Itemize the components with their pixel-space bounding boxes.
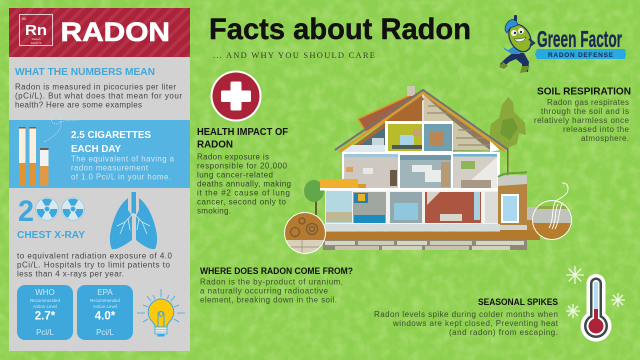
garage wing xyxy=(498,172,527,225)
body: health impact: it the #2 cause of lung xyxy=(197,188,290,198)
text block: chest x-ray: to equivalent radiation exposure of 4.0 xyxy=(17,252,173,260)
icon: cigarettes xyxy=(19,127,48,186)
panel header: radon element xyxy=(9,8,190,57)
card: EPA action level: Recommended xyxy=(90,298,120,303)
panel: cigarettes comparison xyxy=(9,114,190,188)
callout: soil respiration xyxy=(532,183,572,240)
icon: thermometer with snowflakes xyxy=(566,266,625,342)
text block: chest x-ray: less than 4 x-rays per year. xyxy=(17,270,124,278)
card: EPA action level: EPA xyxy=(97,288,113,297)
card: EPA action level xyxy=(77,285,133,340)
text block: chest x-ray: pCi/L. Hospitals try to limit patients to xyxy=(17,260,171,270)
upper floor rooms xyxy=(385,121,453,152)
white eave soffits xyxy=(342,145,385,152)
icon: periodic table Rn tile: Radon xyxy=(32,37,41,41)
icon: light bulb xyxy=(137,289,185,336)
icon: periodic table Rn tile: 222.0176 xyxy=(31,41,42,45)
heading: 2.5 cigarettes each day xyxy=(71,129,151,155)
heading: chest x-ray: CHEST X-RAY xyxy=(17,230,85,241)
heading: health impact xyxy=(197,127,288,150)
text block: cigarettes: The equivalent of having a xyxy=(71,154,175,164)
body: health impact: smoking. xyxy=(197,206,231,216)
banner: Radon Defense: RADON DEFENSE xyxy=(548,52,614,59)
icon: periodic table Rn tile: 86 xyxy=(22,17,26,21)
middle floor xyxy=(342,152,500,190)
card: WHO action level: 2.7* xyxy=(35,310,56,322)
stat: 2 chest x-rays: 2 xyxy=(18,195,34,228)
stone foundation xyxy=(323,240,527,250)
earth band xyxy=(323,230,540,240)
chimney xyxy=(407,86,415,96)
body: seasonal spikes: (and radon) from escaping. xyxy=(449,328,558,337)
card: WHO action level: Recommended xyxy=(30,298,60,303)
body: health impact: cancer, second only to xyxy=(197,198,287,206)
body: health impact: deaths annually, making xyxy=(197,180,291,188)
heading: health impact: RADON xyxy=(197,140,233,150)
heading: seasonal spikes: SEASONAL SPIKES xyxy=(478,297,558,308)
body: soil respiration: released into the xyxy=(563,125,630,134)
icon: periodic table Rn tile: Rn xyxy=(25,22,47,39)
side soil xyxy=(527,207,539,220)
attic left xyxy=(352,127,385,150)
icon: running pickle mascot xyxy=(499,15,536,73)
panel: radon numbers sidebar xyxy=(9,8,190,351)
body: seasonal spikes xyxy=(374,310,559,337)
heading: what the numbers mean: WHAT THE NUMBERS MEAN xyxy=(15,67,155,78)
body: health impact: lung cancer-related xyxy=(197,170,273,180)
wood attic xyxy=(386,97,422,121)
text block: intro: Radon is measured in picocuries per liter xyxy=(15,82,176,92)
icon: periodic table Rn tile xyxy=(20,14,52,46)
heading: 2.5 cigarettes each day: 2.5 CIGARETTES xyxy=(71,129,151,141)
text block: intro: health? Here are some examples xyxy=(15,100,142,110)
body: soil respiration: relatively harmless once xyxy=(534,116,630,125)
logo: Green Factor Radon Defense xyxy=(499,15,626,73)
balcony xyxy=(320,179,500,190)
text block: health impact of radon xyxy=(197,127,291,216)
body: seasonal spikes: windows are kept closed, Preventing heat xyxy=(392,319,559,328)
body: soil respiration: through the soil and is xyxy=(541,107,629,116)
body: health impact: Radon exposure is xyxy=(197,152,269,162)
heading: health impact: HEALTH IMPACT OF xyxy=(197,127,288,138)
text block: chest x-ray xyxy=(17,252,173,278)
illustration: house cutaway xyxy=(304,86,540,250)
text block: seasonal spikes xyxy=(374,297,559,337)
card: WHO action level: Action Level xyxy=(33,304,57,309)
body: where does radon come from: element, breaking down in the soil. xyxy=(200,296,337,304)
lower floor xyxy=(325,190,500,224)
card: WHO action level: Pci/L xyxy=(36,328,54,337)
text block: intro: (pCi/L). But what does that mean for your xyxy=(15,92,182,100)
card: EPA action level: Action Level xyxy=(93,304,117,309)
text block: cigarettes xyxy=(71,154,175,182)
heading: RADON: RADON xyxy=(60,17,170,47)
stat: 2 chest x-rays xyxy=(17,195,85,241)
foundation slab xyxy=(320,224,500,231)
body: soil respiration: atmosphere. xyxy=(581,134,629,143)
body: where does radon come from: a naturally occurring radioactive xyxy=(200,286,329,296)
text block: where does radon come from xyxy=(200,266,353,304)
title: Facts about Radon xyxy=(209,13,471,46)
left tree xyxy=(304,180,324,215)
icon: radiation symbol xyxy=(35,198,59,220)
decorative smoke line xyxy=(44,114,79,142)
card: WHO action level xyxy=(17,285,73,340)
icon: lungs xyxy=(110,192,157,249)
heading: soil respiration: SOIL RESPIRATION xyxy=(537,86,631,98)
gable interior xyxy=(345,94,502,152)
right tree xyxy=(489,97,526,176)
icon: health cross badge xyxy=(210,70,262,122)
body: where does radon come from xyxy=(200,278,343,304)
body: where does radon come from: Radon is the by-product of uranium, xyxy=(200,278,343,286)
heading: 2.5 cigarettes each day: EACH DAY xyxy=(71,143,121,155)
stone attic xyxy=(424,95,453,121)
card: EPA action level: Pci/L xyxy=(96,328,114,337)
text block: cigarettes: radon measurement xyxy=(71,164,149,172)
card: WHO action level: WHO xyxy=(35,288,55,297)
body: health impact: responsible for 20,000 xyxy=(197,162,288,170)
subtitle: ... AND WHY YOU SHOULD CARE xyxy=(213,50,375,60)
icon: radiation symbol xyxy=(61,198,85,220)
text block: soil respiration xyxy=(534,86,631,143)
text block: intro xyxy=(15,82,182,110)
back roof xyxy=(358,93,424,132)
text block: cigarettes: of 1.0 Pci/L in your home. xyxy=(71,172,171,182)
heading: where does radon come from: WHERE DOES RADON COME FROM? xyxy=(200,266,353,277)
body: soil respiration xyxy=(534,98,630,143)
roof edges xyxy=(335,90,507,155)
body: health impact xyxy=(197,152,291,216)
body: soil respiration: Radon gas respirates xyxy=(547,98,629,107)
card: EPA action level: 4.0* xyxy=(95,310,116,322)
body: seasonal spikes: Radon levels spike during colder months when xyxy=(374,310,558,319)
callout: uranium in soil xyxy=(284,212,326,254)
